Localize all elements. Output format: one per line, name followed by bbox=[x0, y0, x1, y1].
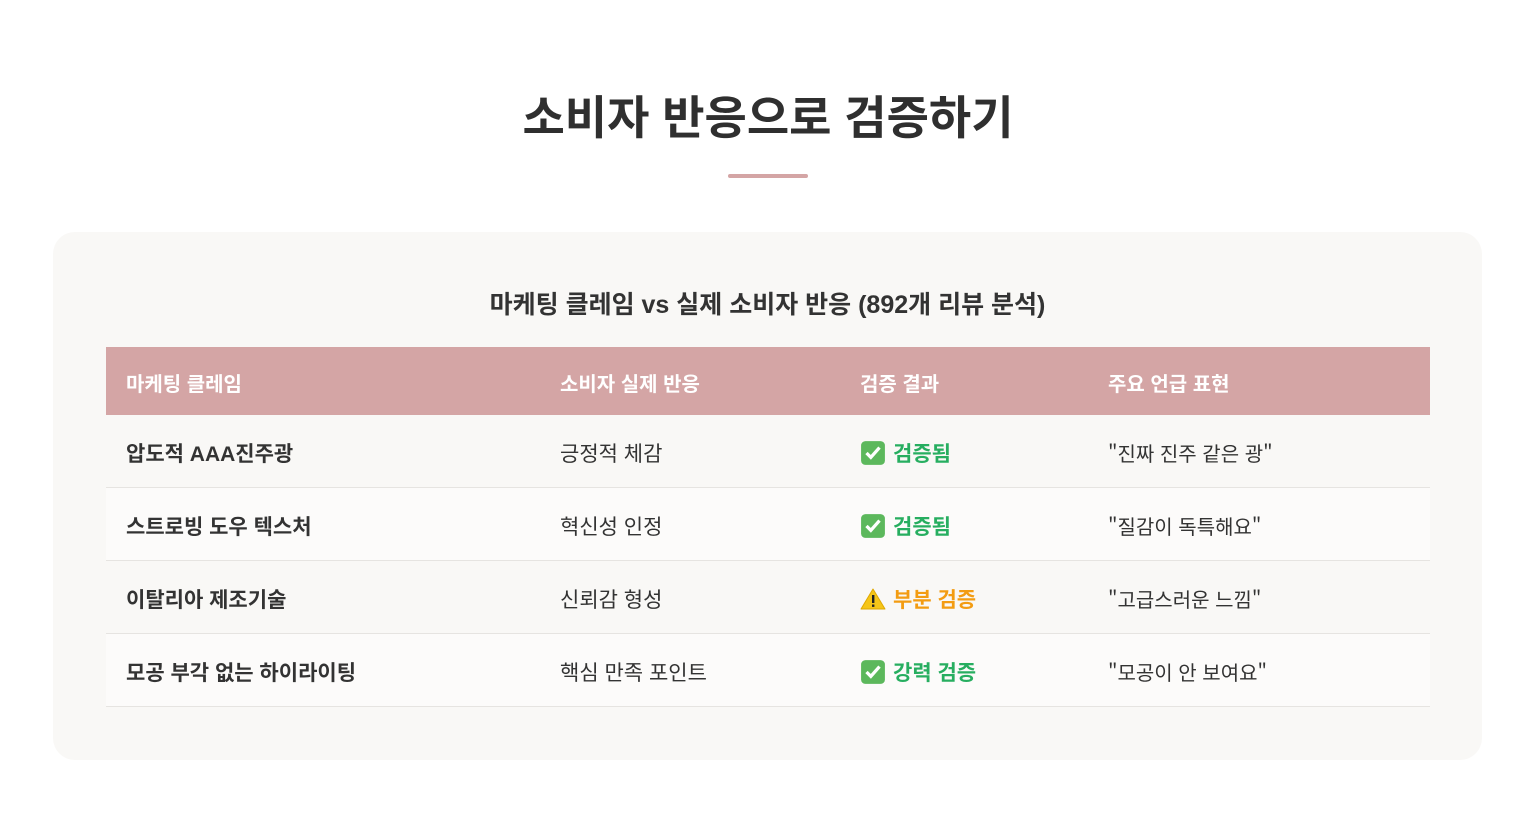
row 1: "진짜 진주 같은 광" bbox=[1108, 438, 1273, 467]
header row: 주요 언급 표현 bbox=[1108, 374, 1230, 396]
row 4: 모공 부각 없는 하이라이팅 bbox=[126, 662, 356, 684]
row 3: 이탈리아 제조기술 bbox=[126, 588, 286, 612]
row 3 bbox=[106, 561, 1430, 634]
row 3: 신뢰감 형성 bbox=[560, 588, 662, 612]
subtitle: 마케팅 클레임 vs 실제 소비자 반응 (892개 리뷰 분석) bbox=[490, 291, 1045, 319]
header row: 검증 결과 bbox=[860, 374, 939, 396]
panel: comparison table bbox=[53, 232, 1482, 760]
row 2: 검증됨 bbox=[893, 516, 951, 538]
row 2: 스트로빙 도우 텍스처 bbox=[126, 516, 312, 538]
row 2: 혁신성 인정 bbox=[560, 516, 662, 538]
row 4: "모공이 안 보여요" bbox=[1108, 657, 1267, 686]
row 2 bbox=[106, 488, 1430, 561]
title: 소비자 반응으로 검증하기 bbox=[522, 92, 1014, 144]
title underline bbox=[728, 174, 808, 178]
row 3: 부분 검증 bbox=[893, 588, 976, 612]
row 1: 긍정적 체감 bbox=[560, 442, 662, 466]
row 1 bbox=[106, 415, 1430, 488]
table bbox=[106, 347, 1430, 707]
header row: 마케팅 클레임 bbox=[126, 374, 242, 396]
row 4 bbox=[106, 634, 1430, 707]
row 2: "질감이 독특해요" bbox=[1108, 511, 1261, 540]
header row: 소비자 실제 반응 bbox=[560, 374, 700, 396]
row 1: 검증됨 bbox=[893, 442, 951, 466]
row 1: 압도적 AAA진주광 bbox=[126, 442, 293, 466]
row 3: "고급스러운 느낌" bbox=[1108, 584, 1261, 613]
row 4: 핵심 만족 포인트 bbox=[560, 662, 707, 684]
row 4: 강력 검증 bbox=[893, 662, 976, 684]
header row bbox=[106, 347, 1430, 415]
